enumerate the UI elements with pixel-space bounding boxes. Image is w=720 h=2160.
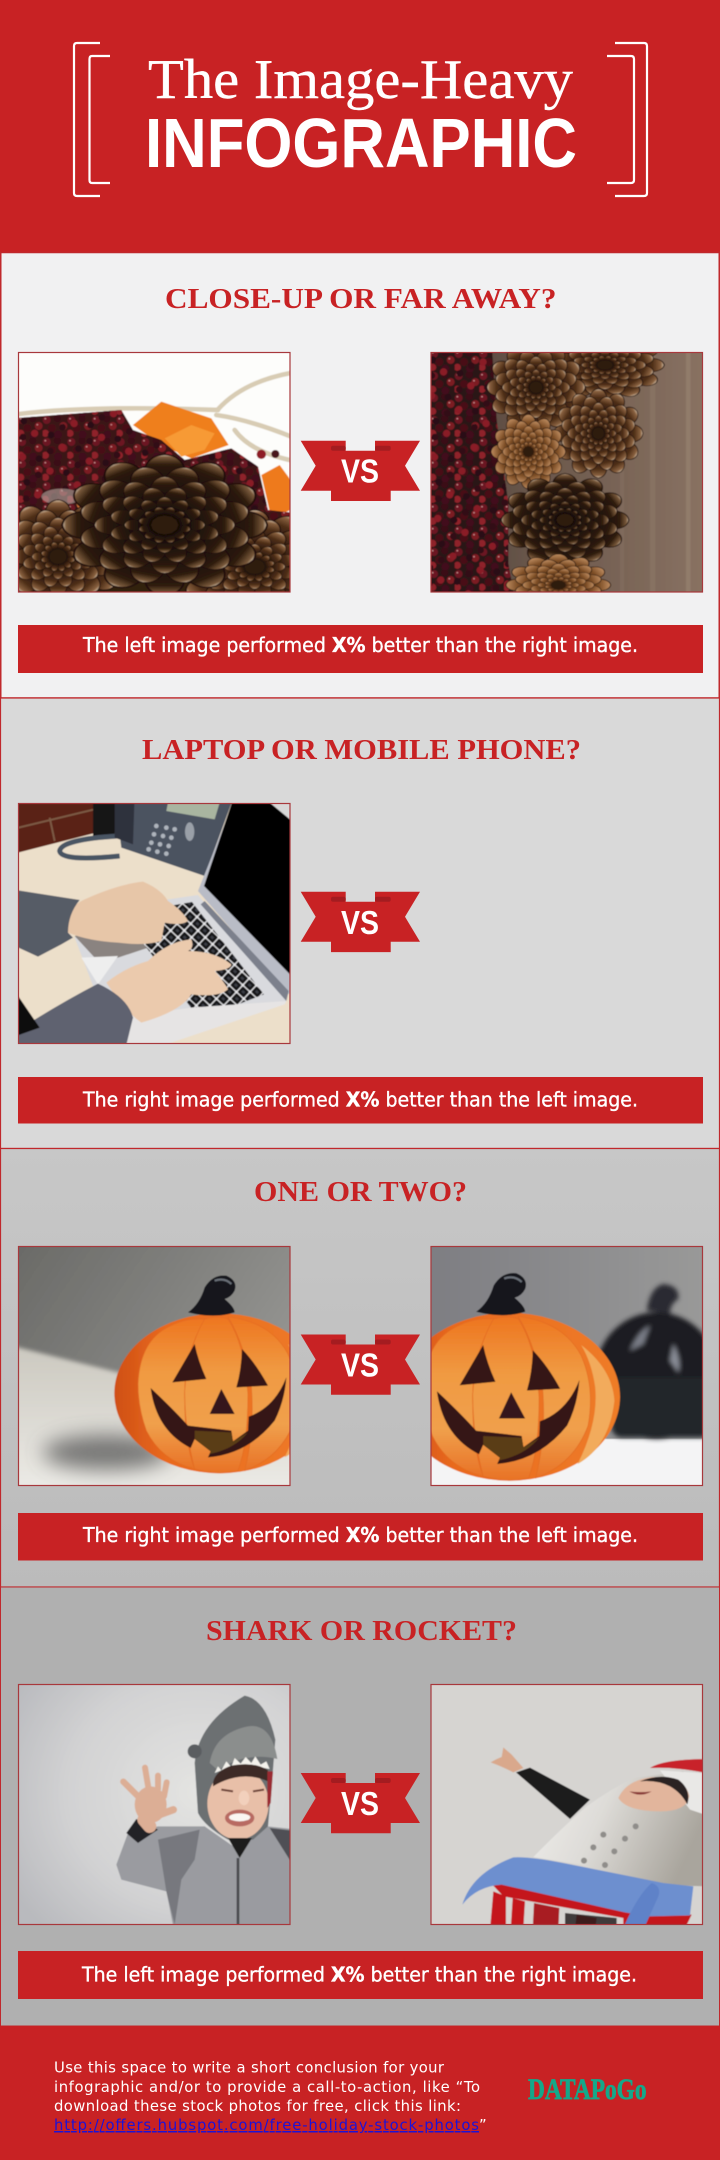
panel: shark or rocket <box>0 1587 720 2026</box>
panel: one or two <box>0 1148 720 1587</box>
conclusion text: Use this space to write a short conclusion for your <box>54 2060 445 2076</box>
image frame <box>431 1684 702 1924</box>
conclusion text: ” <box>479 2117 487 2134</box>
result bar <box>18 1077 703 1124</box>
result bar <box>18 625 703 673</box>
VS label: VS <box>341 904 379 941</box>
result text: The right image performed X% better than the left image. <box>82 1523 638 1547</box>
footer panel <box>0 2026 720 2160</box>
image frame <box>18 1684 290 1924</box>
VS label: VS <box>341 1346 379 1384</box>
panel: close-up or far away <box>0 252 719 698</box>
panel: laptop or mobile phone <box>0 698 720 1148</box>
heading: CLOSE-UP OR FAR AWAY? <box>165 283 556 315</box>
heading: SHARK OR ROCKET? <box>206 1615 517 1647</box>
photo: boy in shark costume <box>19 1685 290 1924</box>
icon: VS ribbon <box>301 892 420 952</box>
right bracket <box>607 43 647 196</box>
heading: LAPTOP OR MOBILE PHONE? <box>142 734 581 766</box>
conclusion text: download these stock photos for free, click this link: <box>54 2098 461 2115</box>
image frame <box>18 1246 290 1486</box>
VS label: VS <box>341 453 379 490</box>
photo: pine cones and berries close-up <box>19 353 290 592</box>
photo: pine cones and berries from far away <box>432 353 702 592</box>
result bar <box>18 1513 703 1560</box>
image frame <box>431 352 702 592</box>
photo: one pumpkin <box>19 1247 290 1485</box>
conclusion text: infographic and/or to provide a call-to-action, like “To <box>54 2079 480 2096</box>
conclusion text <box>54 2060 487 2134</box>
left bracket <box>74 43 110 196</box>
header banner <box>0 0 720 252</box>
heading: ONE OR TWO? <box>254 1176 467 1208</box>
icon: VS ribbon <box>301 1334 420 1395</box>
logo: DataPoGo: DATAPoGo <box>528 2073 646 2106</box>
result text: The left image performed X% better than the right image. <box>82 633 638 657</box>
photo: hands typing on a laptop <box>19 804 290 1043</box>
photo: two pumpkins <box>432 1247 702 1485</box>
conclusion text: http://offers.hubspot.com/free-holiday-stock-photos <box>54 2117 479 2134</box>
title line 2: INFOGRAPHIC <box>145 104 577 182</box>
result text: The right image performed X% better than the left image. <box>82 1088 638 1112</box>
image frame <box>18 352 290 592</box>
result bar <box>18 1951 703 1999</box>
VS label: VS <box>341 1785 379 1822</box>
photo: boy in rocket costume <box>432 1685 702 1924</box>
image frame <box>18 804 290 1044</box>
icon: VS ribbon <box>301 441 420 501</box>
title line 1: The Image-Heavy <box>148 49 573 111</box>
image frame <box>431 1246 702 1486</box>
result text: The left image performed X% better than the right image. <box>81 1962 637 1986</box>
icon: VS ribbon <box>301 1773 420 1833</box>
